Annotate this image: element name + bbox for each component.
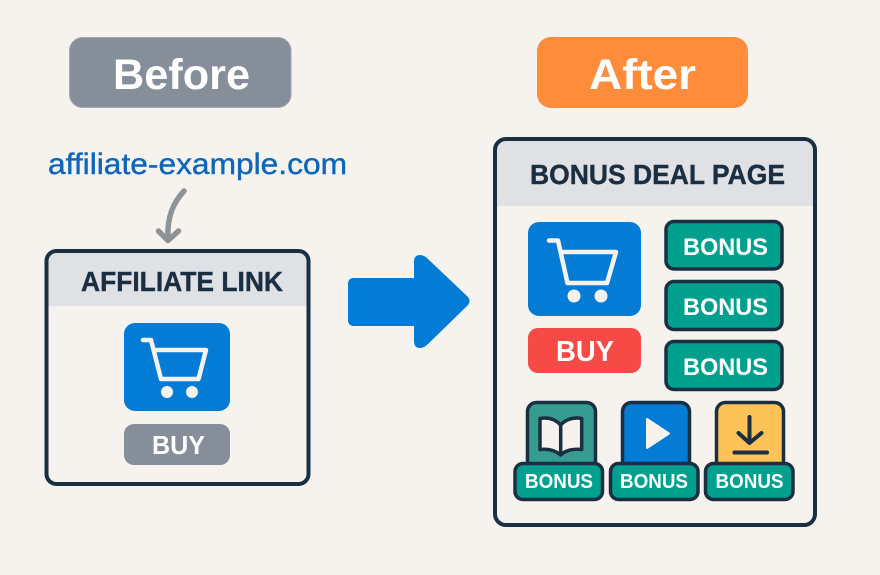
icon: download bbox=[716, 402, 784, 472]
badge: bonus video: BONUS bbox=[620, 471, 688, 493]
badge: bonus download: BONUS bbox=[716, 471, 784, 493]
button: red buy bbox=[528, 328, 641, 373]
icon: play bbox=[622, 402, 690, 472]
panel: bonus deal page bbox=[495, 139, 815, 525]
panel title: affiliate link: AFFILIATE LINK bbox=[81, 266, 283, 297]
button: red buy: BUY bbox=[556, 336, 614, 368]
heading: Before: Before bbox=[113, 51, 250, 99]
badge: bonus 2 bbox=[666, 282, 782, 330]
badge: bonus 1 bbox=[666, 222, 782, 269]
icon: shopping cart bbox=[124, 323, 230, 411]
heading: After bbox=[537, 37, 748, 108]
panel title: bonus deal page: BONUS DEAL PAGE bbox=[530, 159, 785, 190]
bonus item: download bbox=[706, 402, 793, 500]
heading: After: After bbox=[589, 51, 696, 99]
badge: bonus 3 bbox=[666, 342, 782, 390]
badge: bonus 3: BONUS bbox=[683, 354, 768, 381]
button: gray buy bbox=[124, 424, 230, 465]
icon: curved gray arrow bbox=[158, 191, 184, 240]
heading: Before bbox=[70, 38, 291, 108]
badge: bonus 1: BONUS bbox=[683, 234, 768, 261]
panel header: bonus deal page bbox=[495, 139, 815, 206]
icon: shopping cart large bbox=[528, 222, 641, 316]
bonus item: video bbox=[610, 402, 698, 500]
arrow: before to after bbox=[348, 255, 470, 348]
button: gray buy: BUY bbox=[152, 430, 205, 460]
badge: bonus 2: BONUS bbox=[683, 294, 768, 321]
icon: book bbox=[528, 402, 596, 472]
panel: affiliate link bbox=[46, 251, 308, 484]
panel header: affiliate link bbox=[46, 251, 308, 306]
url label: affiliate-example.com bbox=[48, 148, 347, 181]
bonus item: ebook bbox=[515, 402, 602, 500]
badge: bonus ebook: BONUS bbox=[525, 471, 593, 493]
